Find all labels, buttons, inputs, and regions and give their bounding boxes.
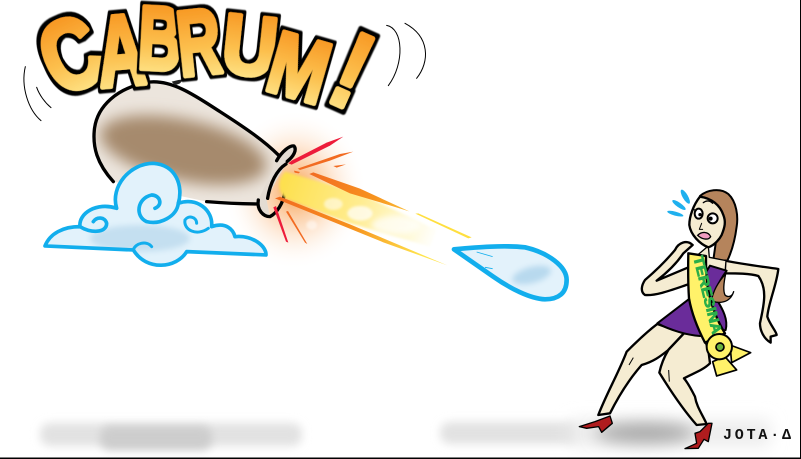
neck and chest xyxy=(692,246,726,273)
blast glow xyxy=(223,110,367,270)
cannon xyxy=(94,79,295,217)
motion lines xyxy=(24,23,426,121)
sweat drops xyxy=(667,188,692,218)
cloud xyxy=(45,163,266,265)
back arm xyxy=(725,261,778,343)
rosette xyxy=(707,334,751,376)
cannon body xyxy=(94,79,278,204)
back leg xyxy=(598,324,684,415)
hair xyxy=(700,190,737,261)
woman xyxy=(579,188,778,449)
sound effect title CABRUM! xyxy=(23,0,390,132)
cannon muzzle xyxy=(258,146,295,217)
sound effect title CABRUM!: M xyxy=(258,12,341,123)
water drop xyxy=(454,246,567,299)
mouth xyxy=(698,232,711,239)
ground shadows xyxy=(40,420,770,450)
signature: JOTA·Δ xyxy=(723,427,791,444)
sash text: TERESINA xyxy=(690,254,725,336)
beam core xyxy=(279,172,437,247)
leg creases xyxy=(629,358,669,382)
head xyxy=(689,197,725,247)
shoes xyxy=(579,416,712,449)
front leg xyxy=(659,333,710,425)
front arm xyxy=(642,242,693,295)
hair tail xyxy=(712,274,734,302)
eyes xyxy=(693,201,718,229)
dress xyxy=(657,266,727,336)
fire streaks xyxy=(273,137,472,265)
sound effect title CABRUM!: ! xyxy=(315,9,390,132)
beam of fire xyxy=(273,137,472,265)
sash xyxy=(688,253,725,343)
